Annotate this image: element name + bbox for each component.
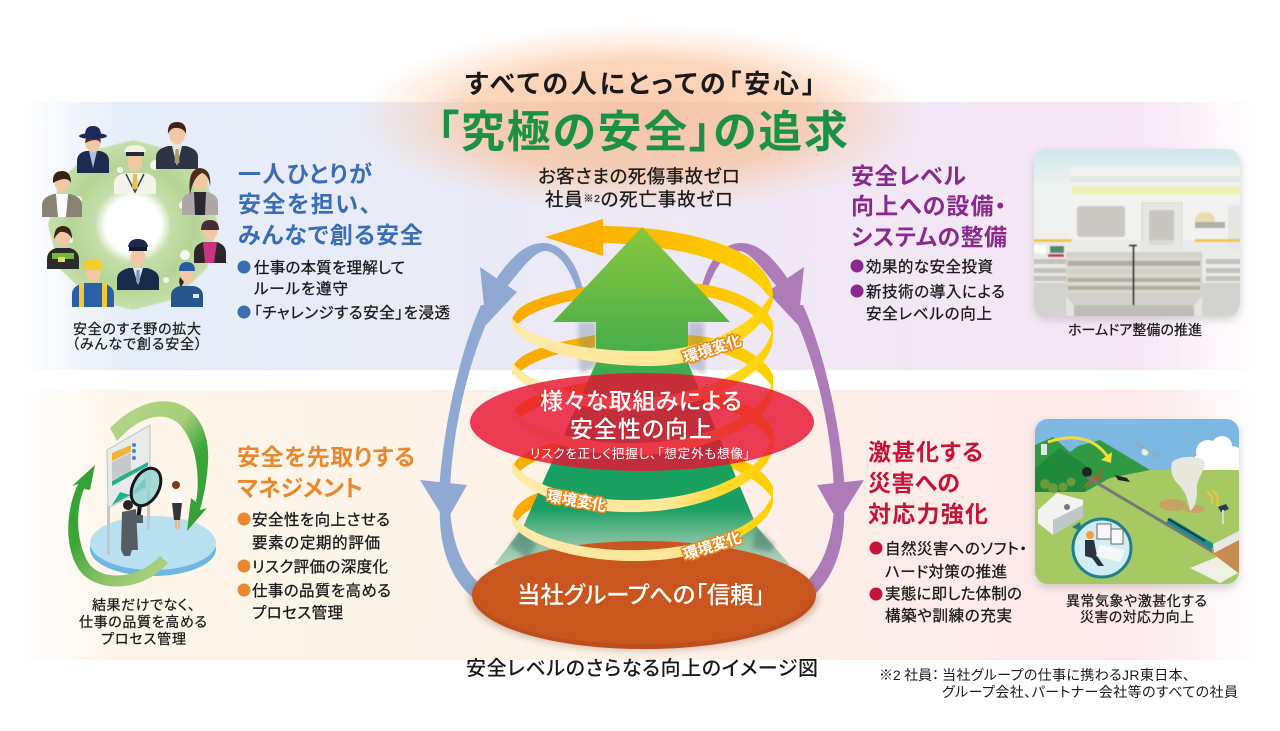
person: blue cap bbox=[171, 262, 203, 307]
person: maroon uniform bbox=[194, 220, 226, 263]
label: environmental change 1: 環境変化 bbox=[681, 331, 744, 367]
bullets: proactive management: 仕事の品質を高める bbox=[252, 582, 391, 600]
oval: safety improvement bbox=[470, 373, 814, 471]
bullets: everyone creates safety: ルールを遵守 bbox=[254, 280, 348, 298]
heading: proactive management: マネジメント bbox=[237, 475, 363, 501]
bullets: everyone creates safety bbox=[238, 259, 450, 322]
bullets: disaster response bbox=[870, 540, 1027, 625]
arrow: purple cycle bbox=[700, 243, 864, 597]
person: navy hat bbox=[77, 126, 109, 173]
disk bbox=[90, 522, 216, 576]
bullets: disaster response: ハード対策の推進 bbox=[885, 563, 1007, 581]
footnote bbox=[879, 667, 1238, 700]
caption: process review bbox=[79, 597, 207, 647]
magnifying glass bbox=[125, 463, 167, 520]
spiral: front bands bbox=[512, 293, 773, 512]
background: orange glow behind title bbox=[355, 23, 925, 213]
arrow: cycle left bbox=[68, 465, 168, 587]
caption: process review: 仕事の品質を高める bbox=[79, 614, 207, 630]
oval: trust: 当社グループへの「信頼」 bbox=[517, 582, 765, 608]
goal line 2: の死亡事故ゼロ bbox=[601, 189, 733, 210]
person: navy cap bbox=[117, 239, 159, 290]
bullets: disaster response: 構築や訓練の充実 bbox=[885, 607, 1012, 625]
caption: staff circle bbox=[72, 321, 202, 352]
goal line 2: 社員 bbox=[545, 189, 583, 210]
heading: equipment and systems bbox=[851, 163, 1007, 250]
footnote: グループ会社、パートナー会社等のすべての社員 bbox=[942, 684, 1238, 700]
central diagram bbox=[420, 219, 864, 650]
illustration: process review bbox=[68, 401, 216, 587]
oval text bbox=[530, 388, 750, 461]
person: officer in white bbox=[114, 145, 156, 194]
bullets: proactive management: プロセス管理 bbox=[252, 604, 343, 622]
diagram caption: 安全レベルのさらなる向上のイメージ図 bbox=[466, 657, 818, 680]
caption: process review: 結果だけでなく、 bbox=[92, 597, 195, 613]
illustration: circle of staff bbox=[42, 122, 226, 310]
panel: proactive management bbox=[68, 401, 415, 647]
bullets: proactive management: リスク評価の深度化 bbox=[252, 558, 388, 576]
caption: staff circle: （みんなで創る安全） bbox=[72, 336, 202, 352]
arrow: large green upward arrow bbox=[494, 227, 790, 565]
heading: everyone creates safety: 安全を担い、 bbox=[238, 191, 371, 217]
board bbox=[107, 425, 150, 555]
woman bbox=[172, 481, 182, 529]
illustration: disaster scene bbox=[1035, 419, 1244, 588]
spiral: lowest front band bbox=[512, 487, 773, 561]
bullets: equipment and systems: 効果的な安全投資 bbox=[866, 258, 993, 276]
panel: everyone creates safety bbox=[42, 122, 450, 352]
heading: equipment and systems: 向上への設備・ bbox=[851, 193, 1006, 219]
bullets: equipment and systems: 新技術の導入による bbox=[866, 283, 1005, 301]
goal line 1: お客さまの死傷事故ゼロ bbox=[538, 166, 740, 187]
heading: equipment and systems: システムの整備 bbox=[851, 224, 1007, 250]
bullets: equipment and systems bbox=[850, 258, 1005, 323]
bullets: proactive management: 要素の定期的評価 bbox=[252, 534, 380, 552]
heading: disaster response bbox=[868, 439, 988, 527]
caption: platform doors: ホームドア整備の推進 bbox=[1068, 322, 1202, 338]
oval: trust bbox=[470, 541, 818, 650]
person: suit bbox=[156, 122, 198, 169]
oval text: 安全性の向上 bbox=[570, 416, 712, 442]
spiral: back bands bbox=[512, 219, 773, 525]
goal line 2: ※2 bbox=[584, 194, 600, 205]
caption: disaster scene: 異常気象や激甚化する bbox=[1066, 593, 1207, 609]
illustration: platform doors bbox=[1030, 145, 1245, 320]
oval text: 様々な取組みによる bbox=[540, 388, 742, 414]
bullets: equipment and systems: 安全レベルの向上 bbox=[866, 305, 992, 323]
heading: proactive management bbox=[237, 444, 415, 501]
man bbox=[121, 500, 143, 556]
title line 2: 「究極の安全」の追求 bbox=[437, 108, 848, 157]
person: woman in gray bbox=[182, 168, 218, 215]
caption: disaster scene: 災害の対応力向上 bbox=[1080, 609, 1194, 625]
bullets: disaster response: 実態に即した体制の bbox=[885, 585, 1022, 603]
arrow: blue cycle bbox=[420, 243, 584, 597]
heading: everyone creates safety bbox=[238, 161, 423, 248]
title line 1: すべての人にとっての「安心」 bbox=[465, 69, 815, 99]
label: environmental change 2: 環境変化 bbox=[546, 487, 608, 515]
heading: disaster response: 災害への bbox=[868, 470, 960, 496]
bullets: everyone creates safety: 「チャレンジする安全」を浸透 bbox=[254, 304, 450, 322]
caption: staff circle: 安全のすそ野の拡大 bbox=[73, 321, 201, 337]
footnote: ※2 社員： bbox=[879, 667, 939, 683]
heading: everyone creates safety: 一人ひとりが bbox=[238, 161, 372, 187]
person: green vest bbox=[47, 226, 79, 269]
bullets: disaster response: 自然災害へのソフト・ bbox=[885, 540, 1027, 558]
bullets: proactive management bbox=[238, 511, 391, 622]
caption: process review: プロセス管理 bbox=[101, 631, 186, 647]
heading: everyone creates safety: みんなで創る安全 bbox=[238, 222, 423, 248]
bullets: proactive management: 安全性を向上させる bbox=[252, 511, 390, 529]
heading: disaster response: 対応力強化 bbox=[868, 501, 988, 527]
goal text bbox=[538, 166, 740, 210]
arrow: cycle right bbox=[110, 401, 208, 531]
caption: disaster scene bbox=[1066, 593, 1207, 625]
panel: disaster response bbox=[868, 419, 1244, 625]
person: yellow helmet bbox=[72, 259, 114, 307]
bullets: everyone creates safety: 仕事の本質を理解して bbox=[254, 259, 405, 277]
footnote: 当社グループの仕事に携わるJR東日本、 bbox=[942, 667, 1190, 683]
panel: equipment and systems bbox=[850, 145, 1245, 338]
heading: proactive management: 安全を先取りする bbox=[237, 444, 415, 470]
oval text: リスクを正しく把握し、「想定外も想像」 bbox=[530, 446, 750, 461]
heading: disaster response: 激甚化する bbox=[868, 439, 983, 465]
person: man in gray jacket bbox=[42, 171, 82, 217]
background: lower band bbox=[20, 390, 1260, 660]
heading: equipment and systems: 安全レベル bbox=[851, 163, 966, 189]
label: environmental change 3: 環境変化 bbox=[681, 528, 744, 564]
background: upper band bbox=[20, 102, 1260, 370]
title bbox=[437, 69, 848, 157]
